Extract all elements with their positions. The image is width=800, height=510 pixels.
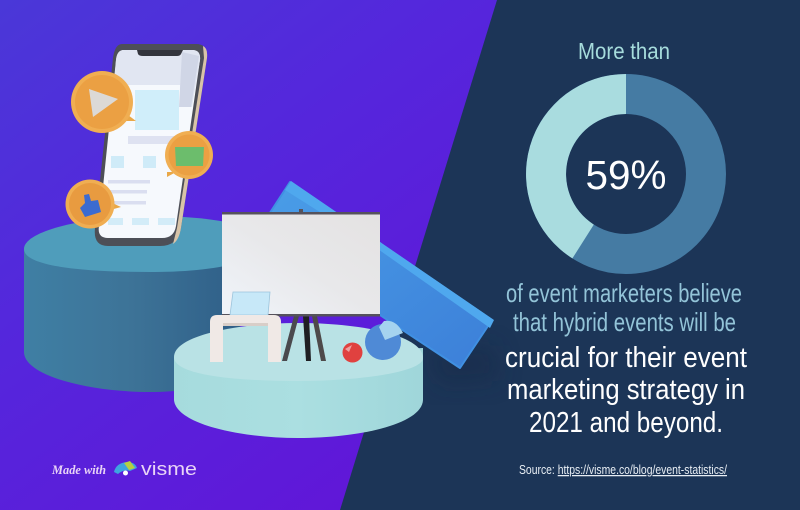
logo: Made with Visme: Made with — [51, 462, 106, 477]
background: purple diagonal panel — [0, 0, 497, 510]
illustration: phone — [95, 44, 207, 246]
logo: Made with Visme — [51, 459, 197, 479]
text block: highlighted statement: marketing strategy in — [507, 374, 745, 406]
icon: thumbs-up bubble — [66, 180, 121, 228]
illustration: light cylinder podium — [174, 323, 423, 438]
icon: play bubble — [71, 71, 136, 133]
heading: More than: More than — [578, 38, 670, 64]
illustration: presentation board — [222, 209, 380, 361]
source line: Source: https://visme.co/blog/event-statistics/ — [519, 463, 727, 477]
illustration: blue cylinder podium — [24, 216, 240, 392]
text block: highlighted statement — [505, 342, 747, 439]
illustration: laptop and desk — [210, 292, 281, 362]
text block: highlighted statement: crucial for their event — [505, 342, 747, 374]
logo: Made with Visme: visme — [141, 459, 197, 479]
text block: marketers statement: that hybrid events will be — [513, 307, 736, 337]
icon: red pie chart — [342, 342, 362, 362]
illustration: tilted blue slab — [262, 181, 500, 385]
icon: message bubble — [165, 131, 213, 179]
donut chart: 59% — [526, 74, 706, 258]
icon: visme logo mark — [114, 461, 137, 476]
text block: highlighted statement: 2021 and beyond. — [529, 407, 723, 439]
icon: blue pie chart — [365, 321, 403, 360]
text block: marketers statement — [506, 278, 742, 337]
phone screen content — [108, 90, 179, 225]
donut value: 59% — [586, 152, 666, 198]
